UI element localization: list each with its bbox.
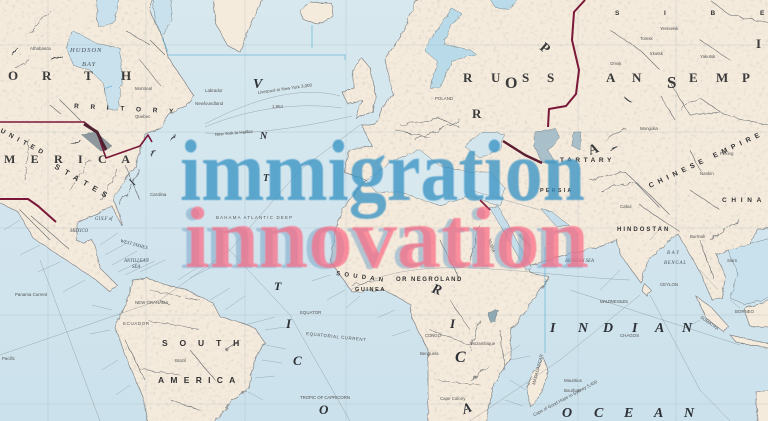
label: Indian Ocean: I <box>549 321 556 336</box>
label: small place names: ECUADOR <box>123 321 149 326</box>
label: small place names: CHAGOS <box>620 333 639 338</box>
blue tint cable lines <box>106 25 545 353</box>
label: small place names: NUBIA <box>487 239 496 253</box>
label: Atlantic letters: N <box>259 131 268 142</box>
land: Iceland <box>300 2 333 24</box>
label: small place names: Liverpool to New York 3,000 <box>257 82 313 95</box>
label: Africa letters: A <box>459 400 474 418</box>
label: Indian Ocean: N <box>683 406 695 421</box>
label: Indian Ocean: N <box>577 321 589 336</box>
label: Atlantic letters: T <box>263 173 270 184</box>
label: Indian Ocean: A <box>653 406 663 421</box>
label: small place names: MALDIVE ISLES <box>600 299 628 304</box>
label: Guinea and Soudan: SOUDAN <box>336 271 384 284</box>
label: small place names: Nankin <box>700 171 714 176</box>
land: Java <box>730 335 768 350</box>
label: Atlantic letters: I <box>285 316 292 331</box>
label: small place names: Cape Colony <box>440 396 466 401</box>
label: Russian Empire: N <box>632 70 642 85</box>
label: small place names: Mauritius <box>564 378 583 383</box>
sea: Persian Gulf <box>540 208 570 226</box>
label: small place names: Yeniseisk <box>660 26 679 31</box>
label: Russian Empire: S <box>547 70 554 85</box>
label: Hudson Bay: BAY <box>82 61 97 68</box>
label: small place names: WEST INDIES <box>119 239 149 251</box>
label: Indian Ocean: E <box>623 406 633 421</box>
label: Chinese Empire: CHINESE EMPIRE <box>648 132 761 190</box>
label: Russian Empire: I <box>756 36 761 51</box>
label: Indian Ocean: I <box>631 321 638 336</box>
label: small place names: Burmah <box>690 234 706 239</box>
label: Guinea and Soudan: OR NEGROLAND <box>396 277 462 283</box>
label: South America <box>158 338 240 385</box>
word face: pink: innovation <box>185 189 589 286</box>
label: North America letters: R <box>42 68 52 83</box>
land: Australia corner <box>756 388 768 421</box>
label: Africa letters: R <box>429 281 444 299</box>
label: small place names: Omsk <box>610 61 622 66</box>
label: United States <box>0 128 109 200</box>
sea: South China Sea <box>728 236 768 304</box>
label: Guinea and Soudan: GUINEA <box>355 287 385 293</box>
border: Mexico and United States <box>0 199 56 222</box>
label: small place names: EQUATOR <box>300 310 321 315</box>
land: North America <box>0 0 194 292</box>
label: small place names: SUMATRA <box>699 315 720 331</box>
label: North America letters: O <box>8 68 18 83</box>
sea: Red Sea <box>490 206 532 270</box>
border: Great Lakes thick section <box>84 124 106 150</box>
label: small place names: Newfoundland <box>195 101 224 106</box>
label: Europe letters: P <box>536 40 553 57</box>
label: small place names: POLAND <box>435 96 453 101</box>
label: small place names: Pacific <box>2 356 16 361</box>
label: Indian Ocean: C <box>594 406 604 421</box>
label: small place names: Peking <box>720 151 734 156</box>
label: small place names: New York to Halifax <box>215 129 254 137</box>
label: small place names: Brazil <box>175 358 186 363</box>
label: small place names: Cape of Good Hope to Sydney 5,400 <box>532 379 599 417</box>
label: Europe letters <box>472 40 553 121</box>
label: Indian Ocean: N <box>681 321 693 336</box>
label: Africa letters: C <box>455 349 466 366</box>
sea: Lake Victoria <box>488 310 498 322</box>
label: small place names: ARABIA <box>517 232 531 248</box>
sea: Arctic channels <box>96 0 172 36</box>
label: Indian Ocean: O <box>562 406 572 421</box>
label: small place names: SEA <box>132 265 140 270</box>
label: Africa letters <box>429 281 474 418</box>
label: America letters: M E R I C A <box>4 152 130 166</box>
sea: Hudson Bay <box>66 30 122 110</box>
label: Hudson Bay: HUDSON <box>69 47 102 54</box>
label: small place names: Athabasca <box>30 46 51 51</box>
label: South America: S O U T H <box>162 338 240 348</box>
label: North America letters: H <box>121 68 131 83</box>
coastal hatching <box>4 220 740 406</box>
label: United States: S T A T E S <box>53 162 109 200</box>
label: small place names: MEXICO <box>69 229 89 234</box>
label: Bay of Bengal <box>664 251 686 266</box>
label: Persia: PERSIA <box>540 188 572 194</box>
label: small place names: Mozambique <box>470 341 496 346</box>
label: small place names: Mongolia <box>640 126 658 131</box>
label: Asia letter: A <box>586 141 602 159</box>
label: Russian Empire: S <box>522 70 529 85</box>
word: immigration: immigration <box>180 122 585 219</box>
land: Greenland <box>212 0 267 52</box>
label: Russian Empire: U <box>491 70 501 85</box>
label: Russian Empire: S <box>667 73 676 92</box>
label: small place names: Tomsk <box>640 36 653 41</box>
land: British Isles <box>342 58 376 118</box>
label: small place names: ANTILLEAN <box>123 259 150 264</box>
border: Canada and United States <box>0 122 152 158</box>
border: Caucasus <box>503 141 542 163</box>
label: Russian Empire: M <box>716 70 728 85</box>
sea: Caspian <box>534 128 560 164</box>
sea: Aral <box>572 132 581 150</box>
label: Hudson Bay <box>69 47 102 68</box>
label: small place names: TROPIC OF CAPRICORN <box>300 395 350 400</box>
label: Territory: R R I T O R Y <box>74 103 174 115</box>
label: Indian Ocean: D <box>602 321 613 336</box>
sea: Baltic <box>424 8 476 88</box>
label: Africa letters: I <box>449 316 456 331</box>
label: Bay of Bengal: BENGAL <box>664 261 686 266</box>
label: United States: U N I T E D <box>0 128 45 156</box>
land: Borneo <box>744 298 768 328</box>
label: Indian Ocean: A <box>654 321 664 336</box>
label: small place names: Quebec <box>135 114 151 119</box>
label: Congo: CONGO <box>425 333 442 338</box>
label: small place names: BAHAMA ATLANTIC DEEP <box>216 215 292 220</box>
label: small place names: Bourbon <box>564 388 581 393</box>
label: Russian Empire: P <box>742 70 750 85</box>
label: small place names: NEW GRANADA <box>135 300 168 305</box>
label: small place names: Yakutsk <box>700 54 716 59</box>
label: Tartary: TARTARY <box>560 157 612 164</box>
seas and lakes <box>66 0 768 322</box>
label: Russian Empire: R <box>463 70 473 85</box>
border: Europe and Asia Urals <box>548 0 585 127</box>
label: small place names: BORNEO <box>735 309 755 314</box>
word shadow: blue offset: innovation <box>180 190 584 287</box>
label: China: CHINA <box>722 197 762 204</box>
label: small place names: EQUATORIAL CURRENT <box>306 331 366 342</box>
label: small place names: Irkutsk <box>650 51 664 56</box>
label: small place names: Panama Current <box>15 292 48 297</box>
label: small place names: Labrador <box>205 88 223 93</box>
label: Europe letters: R <box>472 106 482 121</box>
label: Hindostan: HINDOSTAN <box>617 227 669 233</box>
sea: Great Lakes <box>82 132 112 152</box>
label: small place names: 1,864 <box>272 104 284 109</box>
label: Atlantic letters: O <box>319 402 329 417</box>
label: Atlantic letters <box>253 77 329 417</box>
label: small place names: Carolina <box>150 192 167 197</box>
label: Siberia: S I B E <box>615 10 765 17</box>
label: South America: AMERICA <box>158 375 236 385</box>
land: Eurasia and Africa <box>331 0 768 421</box>
label: small place names: Cabul <box>620 204 631 209</box>
label: small place names: Montreal <box>135 86 152 91</box>
label: small place names: CEYLON <box>660 282 678 287</box>
label: Russian Empire <box>463 36 761 92</box>
label: small place names: GULF of <box>95 217 113 222</box>
label: Atlantic letters: T <box>274 279 282 293</box>
label: North America letters <box>8 68 131 83</box>
label: North America letters: T <box>84 68 93 83</box>
label: Atlantic letters: V <box>253 77 264 92</box>
label: Russian Empire: O <box>505 75 517 92</box>
land: Ceylon <box>642 284 651 296</box>
sea: Black Sea <box>464 132 504 158</box>
border: Suez <box>480 200 490 210</box>
shipping routes <box>0 92 740 421</box>
label: small place names: MADAGASCAR <box>531 354 544 385</box>
land: Sumatra <box>696 296 728 332</box>
label: Indian Ocean <box>549 321 695 421</box>
label: small place names: Siam <box>727 258 737 263</box>
label: small place names: ARABIAN SEA <box>564 259 594 264</box>
label: Russian Empire: A <box>606 70 616 85</box>
label: Bay of Bengal: BAY <box>667 251 680 256</box>
sea: Mediterranean <box>366 150 505 206</box>
land: Madagascar <box>527 358 548 406</box>
label: Guinea and Soudan <box>336 271 462 293</box>
label: Russian Empire: E <box>689 70 698 85</box>
land: South America <box>115 278 265 421</box>
sea: White Sea <box>484 0 524 10</box>
word: innovation <box>180 189 589 287</box>
label: small place names: Benguela <box>420 351 439 356</box>
label: Atlantic letters: C <box>293 353 302 368</box>
political borders <box>0 0 585 222</box>
